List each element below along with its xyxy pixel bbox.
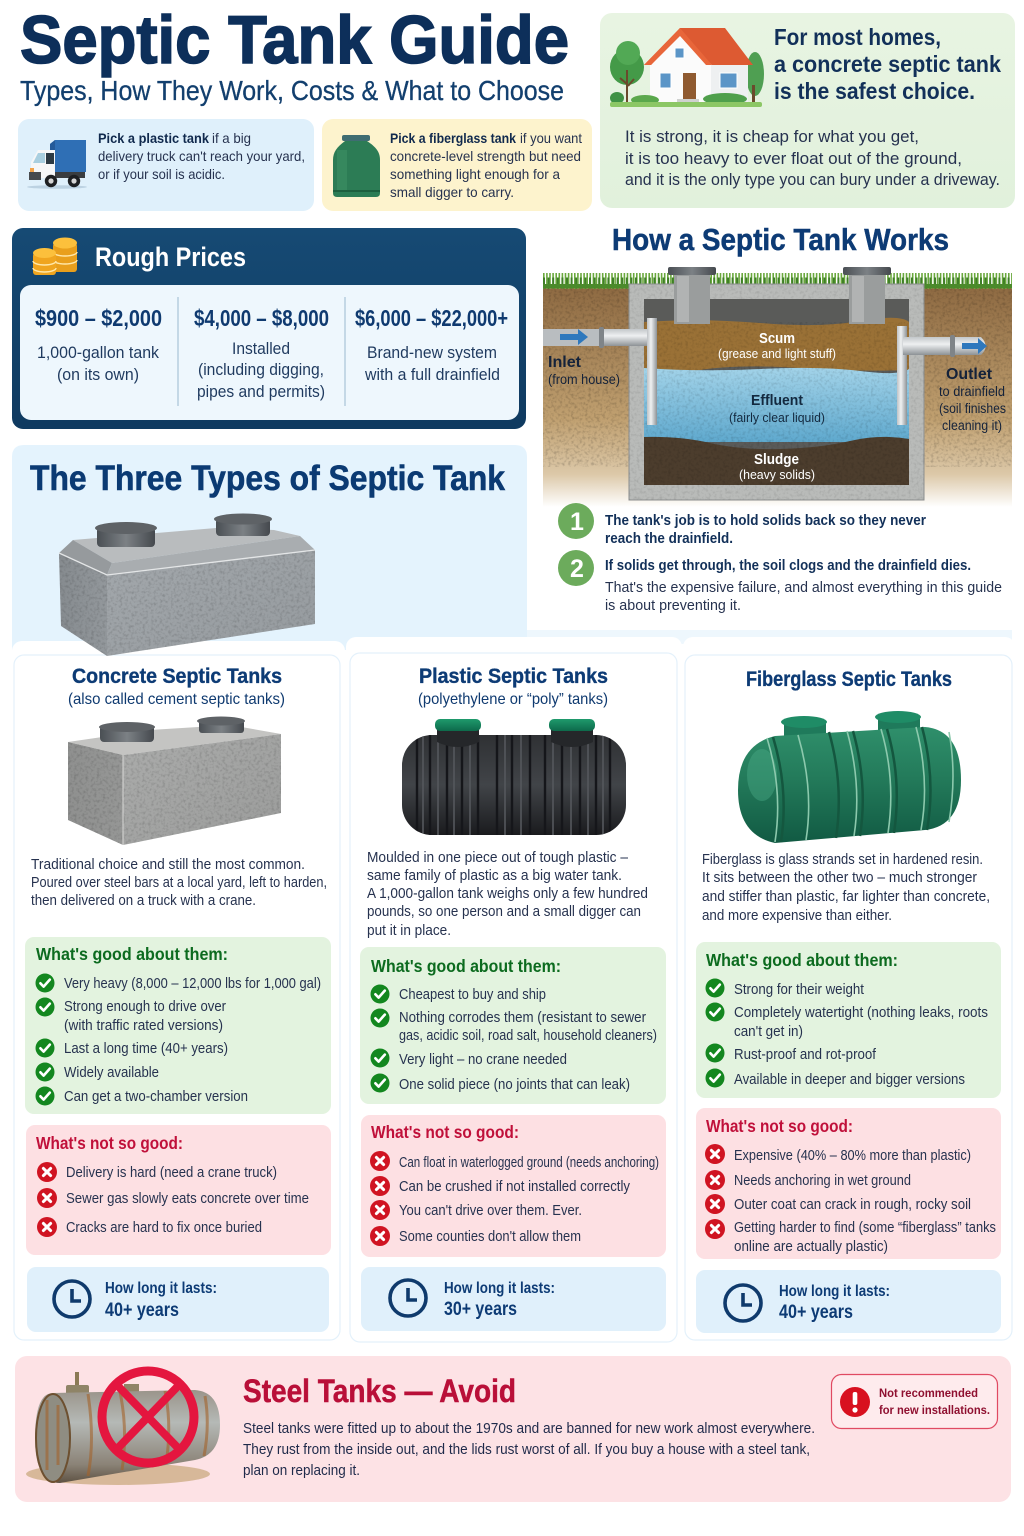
heading: The Three Types of Septic Tank (30, 459, 505, 498)
outlet label: (soil finishes (939, 401, 1006, 416)
cons: Can float in waterlogged ground (needs anchoring) (399, 1154, 659, 1171)
heading (68, 664, 285, 708)
heading: Concrete Septic Tanks (72, 664, 282, 688)
cons: Delivery is hard (need a crane truck) (66, 1164, 277, 1181)
callout: not recommended: Not recommended (879, 1386, 978, 1400)
cons (696, 1108, 1001, 1259)
callout: not recommended: for new installations. (879, 1403, 990, 1417)
price: installed: (including digging, (198, 361, 324, 379)
pros: Last a long time (40+ years) (64, 1040, 228, 1057)
inlet pipe (543, 318, 657, 425)
description: then delivered on a truck with a crane. (31, 892, 256, 909)
pros: What's good about them: (36, 944, 228, 964)
description (702, 851, 990, 924)
panel: pick a plastic tank (18, 119, 314, 211)
description: They rust from the inside out, and the lids rust worst of all. If you buy a house with a steel tank, (243, 1441, 810, 1458)
recommendation body: it is too heavy to ever float out of the ground, (625, 150, 962, 168)
heading: (also called cement septic tanks) (68, 691, 285, 708)
description: Steel tanks were fitted up to about the 1970s and are banned for new work almost everywhere. (243, 1420, 815, 1437)
card: fiberglass (685, 655, 1012, 1340)
price: new system: $6,000 – $22,000+ (355, 305, 508, 331)
inlet label (548, 354, 620, 387)
inlet label: Inlet (548, 354, 582, 371)
layer labels: (heavy solids) (739, 468, 815, 482)
step 1: The tank's job is to hold solids back so they never (605, 512, 926, 529)
tank image: plastic (402, 719, 626, 835)
panel: pick a fiberglass tank (322, 119, 592, 211)
panel: recommendation (600, 13, 1015, 208)
step 2: That's the expensive failure, and almost everything in this guide (605, 579, 1002, 596)
recommendation heading (774, 24, 1001, 104)
icon: green tank (333, 135, 380, 197)
panel: pick a plastic tank: if a big (212, 130, 251, 146)
cons: Can be crushed if not installed correctly (399, 1178, 630, 1195)
step 1: 1 (570, 508, 584, 536)
cons (26, 1125, 331, 1255)
heading: how a septic tank works: How a Septic Tank Works (612, 222, 949, 257)
layer labels: (grease and light stuff) (718, 347, 836, 361)
pros: What's good about them: (706, 950, 898, 970)
card backgrounds (12, 637, 1015, 1348)
lifespan: How long it lasts: (779, 1283, 890, 1300)
pros: gas, acidic soil, road salt, household cleaners) (399, 1027, 657, 1044)
outlet label (939, 366, 1006, 433)
price: new system: with a full drainfield (364, 366, 500, 384)
effluent layer (644, 368, 909, 442)
lifespan: 40+ years (105, 1300, 179, 1321)
step 1: reach the drainfield. (605, 530, 733, 547)
cons (361, 1115, 666, 1257)
pros (25, 937, 331, 1114)
price: installed (194, 305, 329, 401)
card: concrete (14, 655, 340, 1340)
cons: Some counties don't allow them (399, 1228, 581, 1245)
pros: can't get in) (734, 1023, 803, 1040)
heading: (polyethylene or “poly” tanks) (418, 691, 608, 708)
description: plan on replacing it. (243, 1462, 360, 1479)
step 2: If solids get through, the soil clogs and the drainfield dies. (605, 557, 971, 574)
pros: One solid piece (no joints that can leak) (399, 1076, 630, 1093)
price: tank only: (on its own) (57, 366, 139, 384)
description (243, 1420, 815, 1479)
lifespan: How long it lasts: (444, 1280, 555, 1297)
price: installed: Installed (232, 340, 290, 358)
pros: What's good about them: (371, 956, 561, 976)
panel: pick a fiberglass tank: concrete-level strength but need (390, 148, 581, 164)
icon: house with trees (610, 28, 764, 107)
lifespan (361, 1267, 666, 1331)
pros: Strong enough to drive over (64, 998, 226, 1015)
cons: Cracks are hard to fix once buried (66, 1219, 262, 1236)
price: tank only: 1,000-gallon tank (37, 344, 160, 362)
panel: steel tanks warning (15, 1356, 1011, 1502)
recommendation heading: a concrete septic tank (774, 51, 1001, 77)
pros (360, 947, 666, 1104)
outlet label: to drainfield (939, 384, 1005, 399)
price: tank only (35, 305, 162, 384)
layer labels: (fairly clear liquid) (729, 411, 825, 425)
heading: Rough Prices (95, 242, 246, 272)
price: new system (355, 305, 508, 384)
description: and stiffer than plastic, far lighter than concrete, (702, 888, 990, 905)
description: pounds, so one person and a small digger can (367, 903, 641, 920)
cons: Sewer gas slowly eats concrete over time (66, 1190, 309, 1207)
access risers (668, 267, 891, 324)
inlet label: (from house) (548, 372, 620, 387)
panel: the three types (12, 445, 1012, 650)
outlet label: cleaning it) (942, 418, 1002, 433)
panel: pick a fiberglass tank: Pick a fiberglass tank (390, 130, 516, 146)
cons: What's not so good: (36, 1133, 183, 1153)
cons: What's not so good: (371, 1122, 519, 1142)
pros: Rust-proof and rot-proof (734, 1046, 877, 1063)
pros: Available in deeper and bigger versions (734, 1071, 965, 1088)
title: Septic Tank Guide (20, 2, 569, 78)
description: A 1,000-gallon tank weighs only a few hundred (367, 885, 648, 902)
prohibition sign (102, 1371, 194, 1463)
lifespan: 30+ years (444, 1299, 517, 1320)
description (31, 856, 327, 909)
card: plastic (350, 653, 677, 1342)
description: Moulded in one piece out of tough plastic – (367, 849, 629, 866)
cons: Expensive (40% – 80% more than plastic) (734, 1147, 971, 1164)
layer labels (718, 330, 836, 482)
description: It sits between the other two – much stronger (702, 869, 977, 886)
lifespan (696, 1270, 1001, 1333)
pros: Strong for their weight (734, 981, 865, 998)
tank image: concrete (68, 716, 281, 845)
description: and more expensive than either. (702, 907, 892, 924)
cons: Needs anchoring in wet ground (734, 1172, 911, 1189)
pros: Very heavy (8,000 – 12,000 lbs for 1,000 gal) (64, 975, 321, 992)
icon: rusty steel tank crossed out (26, 1371, 220, 1485)
panel: pick a fiberglass tank: something light enough for a (390, 166, 560, 182)
outlet label: Outlet (946, 366, 993, 383)
pros: Very light – no crane needed (399, 1051, 567, 1068)
panel: pick a fiberglass tank: small digger to carry. (390, 184, 514, 200)
heading: Plastic Septic Tanks (419, 664, 608, 688)
recommendation heading: is the safest choice. (774, 78, 975, 104)
cons: You can't drive over them. Ever. (399, 1202, 582, 1219)
icon: coins (33, 238, 77, 275)
pros: Nothing corrodes them (resistant to sewer (399, 1009, 646, 1026)
step 1 (558, 503, 926, 547)
sludge layer (644, 437, 909, 485)
step 2: 2 (570, 555, 584, 583)
heading: Steel Tanks — Avoid (243, 1373, 516, 1409)
price table (20, 285, 519, 420)
price: tank only: $900 – $2,000 (35, 305, 162, 331)
cons: online are actually plastic) (734, 1238, 888, 1255)
cons: What's not so good: (706, 1116, 853, 1136)
icon: delivery truck (27, 140, 87, 189)
layer labels: Sludge (754, 451, 799, 468)
pros (696, 942, 1001, 1098)
layer labels: Effluent (751, 392, 803, 409)
panel: rough prices (12, 228, 526, 429)
heading: Fiberglass Septic Tanks (746, 667, 952, 691)
heading (418, 664, 608, 708)
description: Poured over steel bars at a local yard, left to harden, (31, 874, 327, 891)
step 2: is about preventing it. (605, 597, 741, 614)
description: put it in place. (367, 922, 451, 939)
price: new system: Brand-new system (367, 344, 497, 362)
recommendation body: and it is the only type you can bury under a driveway. (625, 171, 1000, 189)
description: same family of plastic as a big water tank. (367, 867, 622, 884)
panel: pick a plastic tank: or if your soil is acidic. (98, 166, 225, 182)
description: Fiberglass is glass strands set in hardened resin. (702, 851, 983, 868)
layer labels: Scum (759, 330, 795, 347)
price: installed: $4,000 – $8,000 (194, 305, 329, 331)
panel: pick a plastic tank: Pick a plastic tank (98, 130, 209, 146)
description: Traditional choice and still the most common. (31, 856, 305, 873)
diagram: septic tank cross-section (543, 267, 1012, 507)
scum layer (644, 318, 909, 373)
lifespan: 40+ years (779, 1302, 853, 1323)
outlet pipe (897, 326, 987, 425)
pros: Completely watertight (nothing leaks, roots (734, 1004, 988, 1021)
recommendation body: It is strong, it is cheap for what you get, (625, 128, 919, 146)
recommendation body (625, 128, 1000, 189)
lifespan: How long it lasts: (105, 1280, 217, 1297)
pros: Cheapest to buy and ship (399, 986, 546, 1003)
step 2 (558, 550, 1002, 614)
callout: not recommended (832, 1374, 998, 1428)
subtitle: Types, How They Work, Costs & What to Choose (20, 75, 564, 106)
pros: (with traffic rated versions) (64, 1017, 223, 1034)
pros: Widely available (64, 1064, 159, 1081)
pros: Can get a two-chamber version (64, 1088, 248, 1105)
description (367, 849, 648, 939)
tank image: large concrete (59, 514, 315, 656)
price: installed: pipes and permits) (197, 383, 325, 401)
lifespan (27, 1267, 329, 1332)
tank image: fiberglass (738, 711, 961, 843)
panel: pick a fiberglass tank: if you want (520, 130, 582, 146)
cons: Outer coat can crack in rough, rocky soil (734, 1196, 971, 1213)
panel: pick a plastic tank: delivery truck can't reach your yard, (98, 148, 305, 164)
recommendation heading: For most homes, (774, 24, 941, 50)
